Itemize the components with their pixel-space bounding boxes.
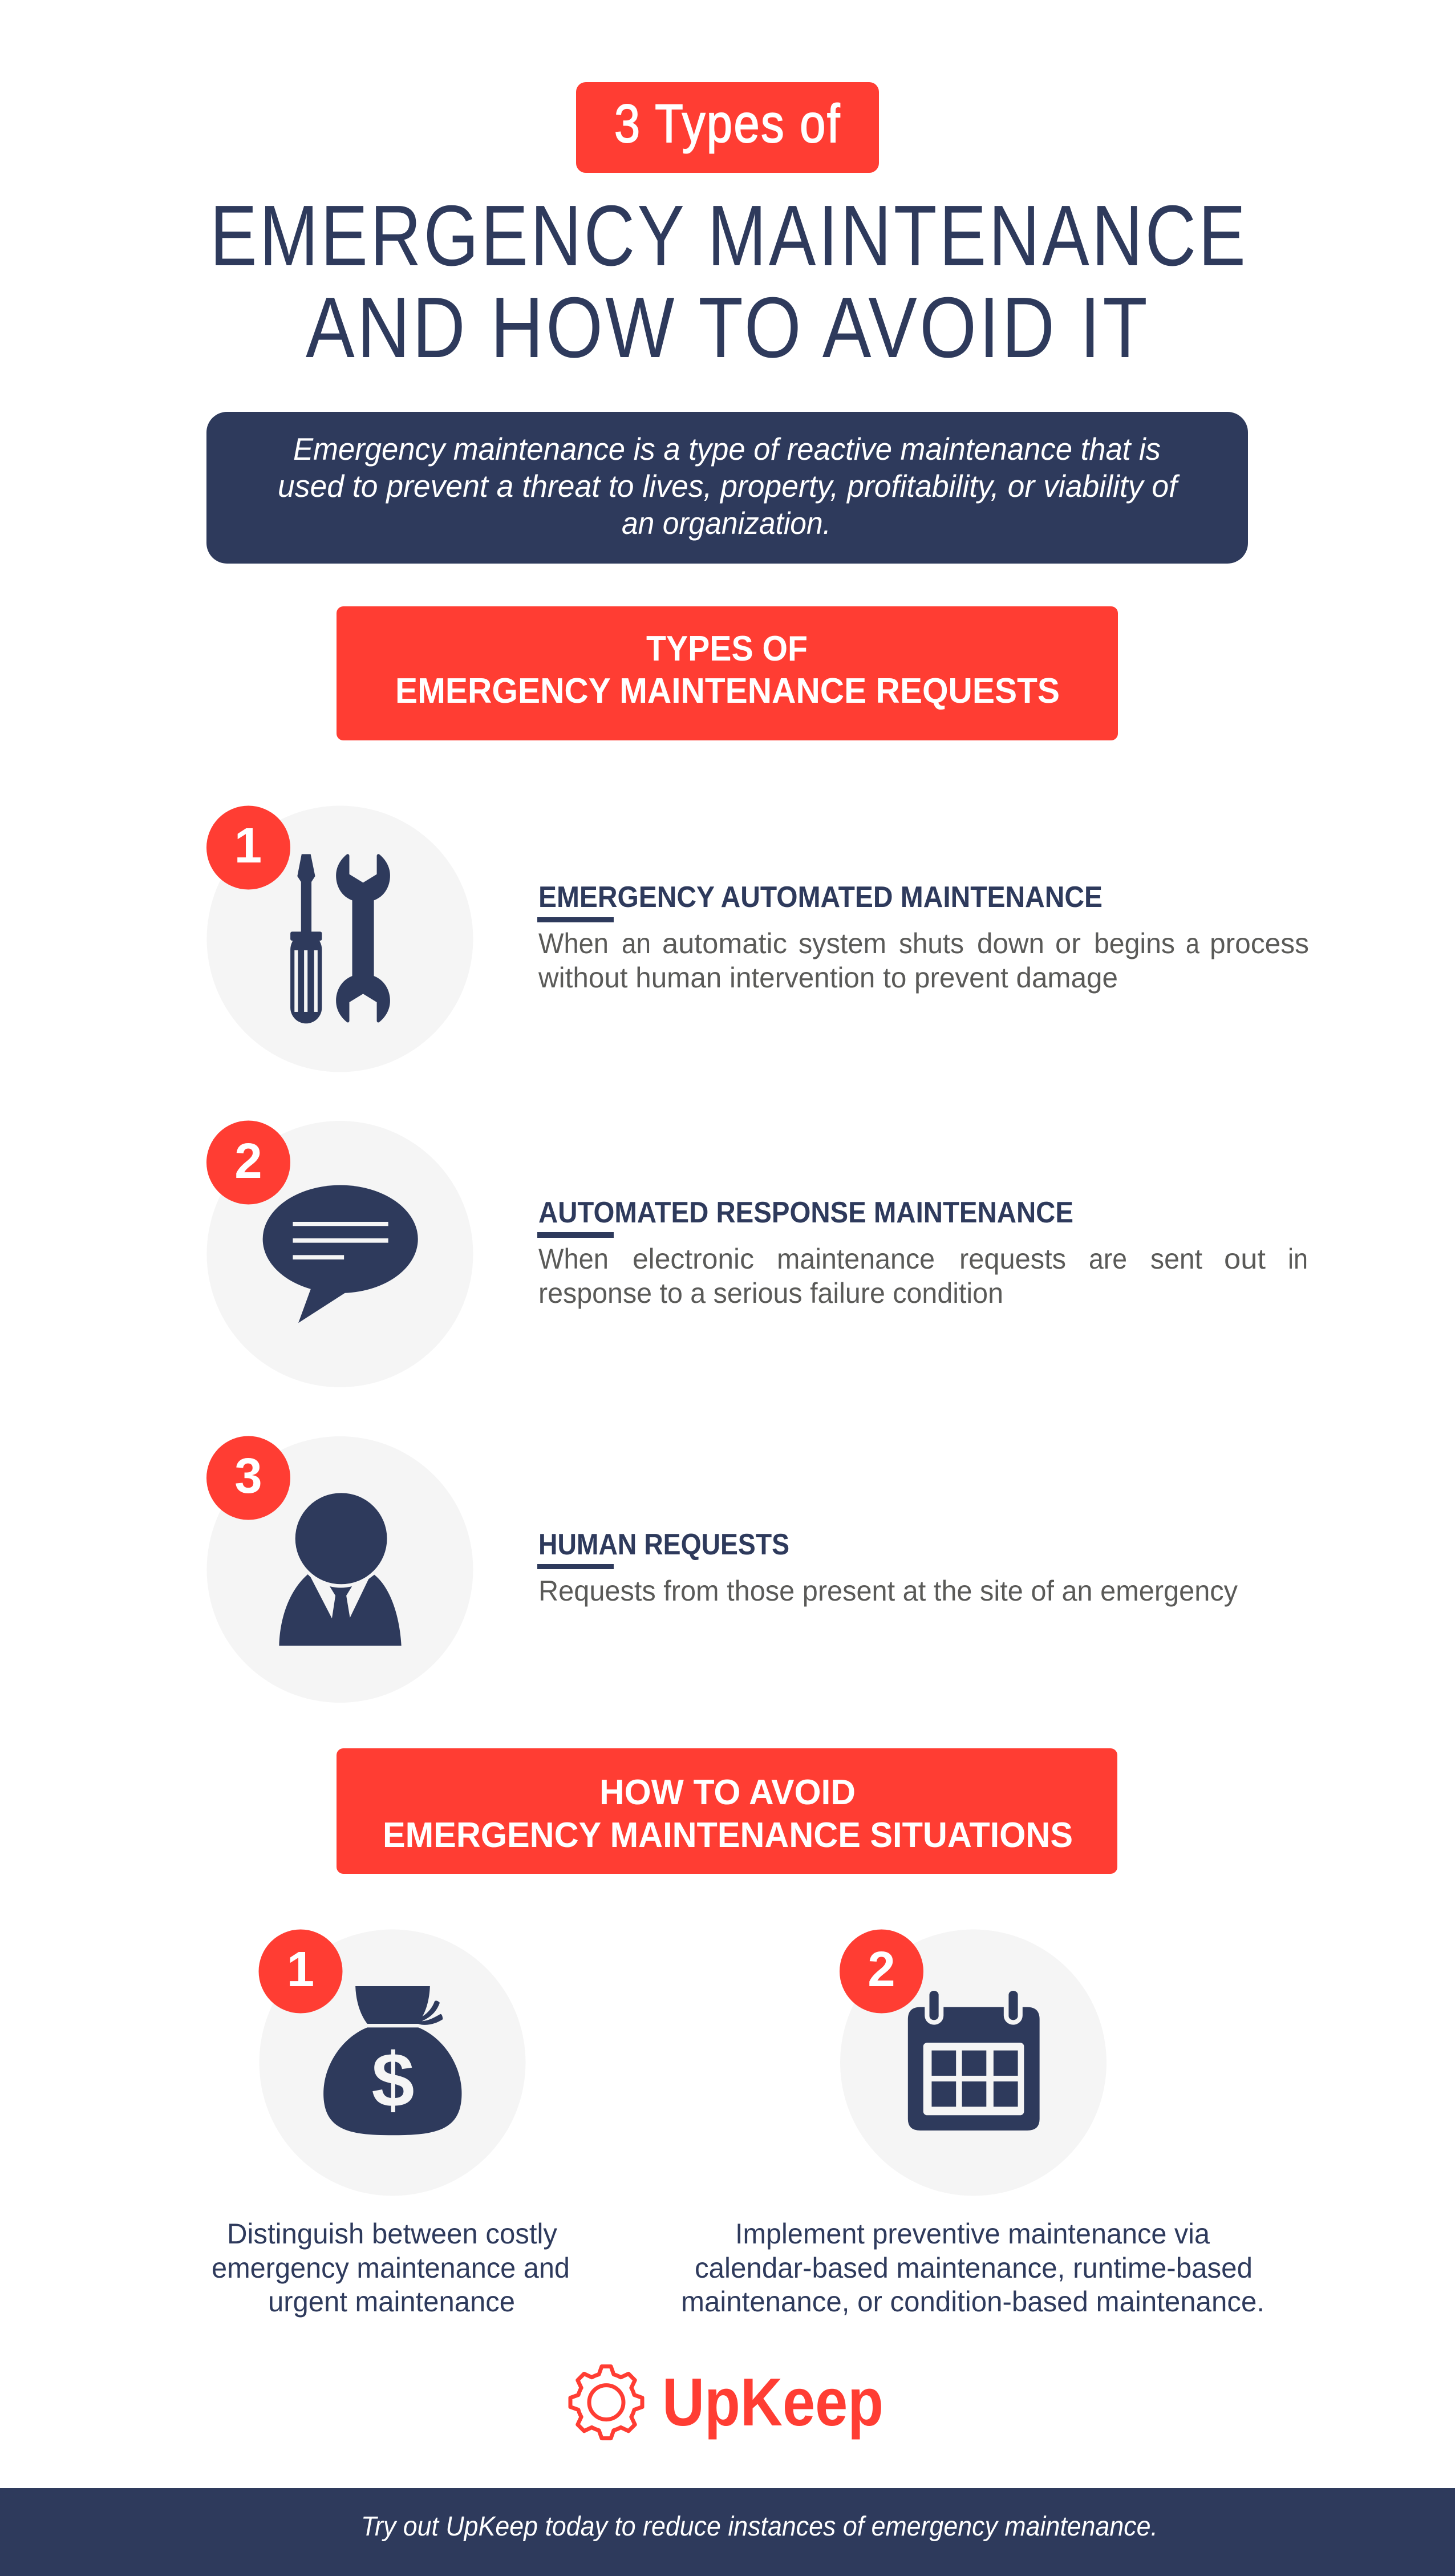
description 1: system [799,927,886,959]
icon: speech bubble [263,1185,418,1323]
number badge tip 2 [840,1929,923,2014]
icon: gear [570,2367,642,2439]
item 2: automated response maintenance [206,1120,1308,1387]
number badge tip 1 [259,1929,342,2014]
number badge 3: 3 [234,1448,262,1504]
panel: definition: Emergency maintenance is a type of reactive maintenance that is [293,431,1161,467]
description 1: When [538,927,609,959]
title [210,187,1248,375]
description 1: an [622,927,651,959]
title: AND HOW TO AVOID IT [306,279,1150,375]
description 1: without human intervention to prevent damage [538,962,1118,994]
description 1: process [1210,927,1309,959]
section heading: how to avoid: EMERGENCY MAINTENANCE SITUATIONS [383,1816,1073,1855]
pill heading: 3 Types of: 3 Types of [614,94,841,154]
text tip 2 [681,2218,1264,2318]
text tip 2: maintenance, or condition-based maintenance. [681,2286,1264,2318]
text tip 1 [212,2218,570,2318]
title: EMERGENCY MAINTENANCE [210,187,1248,283]
number badge tip 1: 1 [287,1942,314,1997]
description 2: out [1224,1243,1266,1275]
icon circle 1 [206,805,473,1072]
number badge 1 [206,805,290,890]
section heading: how to avoid [337,1748,1117,1874]
tip 2: preventive maintenance [681,1929,1264,2318]
pill heading: 3 Types of [576,82,879,173]
description 1: a [1186,927,1199,959]
heading 3: HUMAN REQUESTS [538,1528,789,1561]
panel: definition: an organization. [622,505,831,541]
description 2: electronic [633,1243,754,1275]
section heading: types of requests [337,606,1118,740]
section heading: types of requests: TYPES OF [646,629,808,669]
icon: calendar [908,1991,1040,2131]
panel: definition [206,412,1248,564]
text tip 1: emergency maintenance and [212,2252,570,2284]
item 3: human requests [206,1436,1238,1703]
number badge 2 [206,1120,290,1205]
icon: screwdriver and wrench [290,854,390,1023]
description 1: automatic [662,927,787,959]
number badge 3 [206,1436,290,1520]
icon circle tip 2 [840,1929,1107,2196]
wordmark: UpKeep [662,2364,883,2440]
heading 2: AUTOMATED RESPONSE MAINTENANCE [538,1196,1073,1229]
description 1: down [977,927,1044,959]
panel: definition: used to prevent a threat to lives, property, profitability, or viability of [278,468,1181,504]
description 2: in [1288,1243,1308,1275]
description 1: or [1055,927,1081,959]
description 2: maintenance [777,1243,935,1275]
description 2: are [1089,1243,1127,1275]
text tip 1: urgent maintenance [268,2286,515,2318]
footer banner [0,2488,1455,2576]
number badge 2: 2 [234,1133,262,1189]
section heading: types of requests: EMERGENCY MAINTENANCE REQUESTS [395,671,1060,711]
description 2 [538,1243,1308,1309]
icon circle tip 1 [259,1929,526,2196]
item 1: emergency automated maintenance [206,805,1309,1072]
icon: money bag [323,1986,461,2135]
description 2: When [538,1243,609,1275]
number badge 1: 1 [234,818,262,873]
icon: person in suit [279,1493,402,1646]
number badge tip 2: 2 [868,1942,895,1997]
description 1: shuts [899,927,964,959]
underline 2 [537,1232,614,1238]
description 2: response to a serious failure condition [538,1277,1003,1309]
description 2: sent [1150,1243,1202,1275]
description 3: Requests from those present at the site of an emergency [538,1575,1238,1607]
tip 1: distinguish costs [212,1929,570,2318]
section heading: how to avoid: HOW TO AVOID [599,1773,856,1812]
icon circle 2 [206,1121,473,1387]
description 1: begins [1094,927,1175,959]
description 1 [538,927,1309,994]
underline 3 [537,1564,614,1569]
heading 1: EMERGENCY AUTOMATED MAINTENANCE [538,881,1103,914]
text tip 2: calendar-based maintenance, runtime-based [695,2252,1253,2284]
icon: money bag: $ [371,2037,415,2123]
icon circle 3 [206,1436,473,1703]
footer banner: Try out UpKeep today to reduce instances of emergency maintenance. [361,2512,1158,2542]
logo: UpKeep [570,2364,883,2440]
description 2: requests [959,1243,1066,1275]
text tip 2: Implement preventive maintenance via [735,2218,1210,2250]
text tip 1: Distinguish between costly [227,2218,557,2250]
underline 1 [537,917,614,922]
